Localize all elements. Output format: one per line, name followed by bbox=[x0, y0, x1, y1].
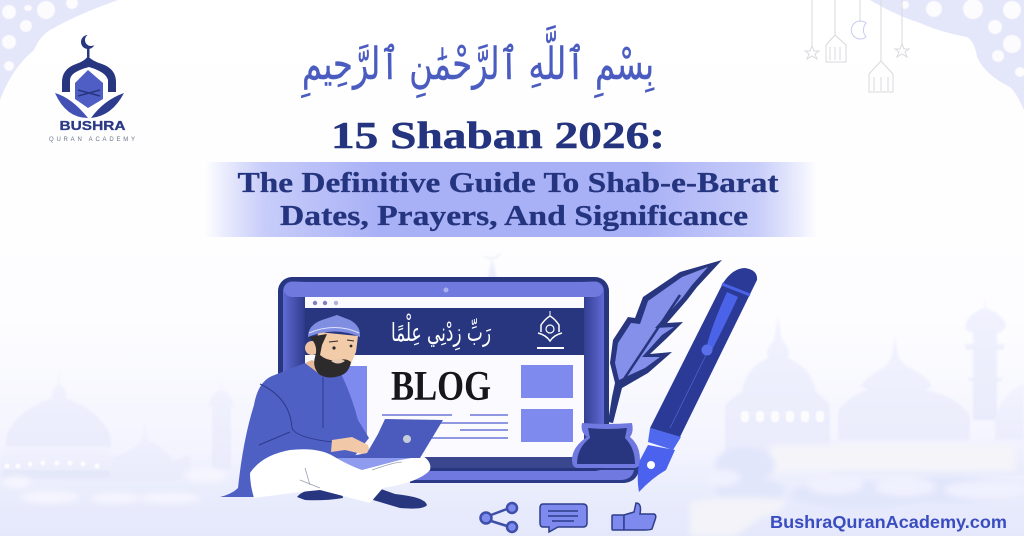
ornament: top-right corner bbox=[870, 0, 1024, 110]
icon: comment bbox=[540, 504, 587, 532]
neck bbox=[305, 360, 335, 376]
logo wordmark: BUSHRA bbox=[60, 119, 126, 133]
ear bbox=[305, 341, 319, 355]
calligraphy: bismillah: بِسْمِ ٱللَّهِ ٱلرَّحْمَٰنِ ٱلرَّحِيمِ bbox=[301, 25, 655, 99]
laptop base bbox=[410, 466, 640, 483]
title: 15 Shaban 2026: bbox=[331, 115, 665, 157]
logo bbox=[49, 34, 135, 143]
subtitle band bbox=[205, 162, 817, 237]
page header bbox=[305, 308, 584, 355]
face bbox=[316, 332, 358, 372]
man with laptop bbox=[220, 315, 443, 509]
browser dots bbox=[313, 301, 338, 305]
pen barrel bbox=[650, 268, 757, 437]
small laptop bbox=[340, 419, 443, 458]
mosque skyline right bbox=[484, 254, 1024, 475]
image blocks bbox=[521, 365, 573, 398]
subtitle line 2: Dates, Prayers, And Significance bbox=[280, 201, 748, 232]
icon: share bbox=[480, 503, 517, 532]
screen bbox=[300, 297, 584, 468]
pen collar bbox=[648, 428, 681, 450]
ornament: top-left corner bbox=[0, 0, 118, 100]
icon: thumbs up bbox=[612, 503, 656, 530]
band under left dome bbox=[3, 470, 110, 478]
website url: BushraQuranAcademy.com bbox=[770, 512, 1007, 532]
fountain pen bbox=[638, 268, 757, 492]
header calligraphy: رَبِّ زِدْنِي عِلْمًا bbox=[391, 314, 491, 351]
icon: mosque with hands bbox=[55, 34, 124, 118]
blog word: BLOG bbox=[391, 364, 491, 410]
robe bbox=[220, 363, 369, 497]
logo tagline: QURAN ACADEMY bbox=[49, 137, 135, 143]
lap shirt bbox=[337, 458, 420, 472]
quill feather bbox=[608, 260, 722, 423]
header mini logo bbox=[537, 311, 564, 348]
cap bbox=[308, 315, 360, 337]
mosque skyline left bbox=[0, 368, 236, 480]
hanging lanterns and stars bbox=[805, 0, 909, 92]
shoes bbox=[297, 489, 343, 500]
clouds right bbox=[690, 445, 1024, 536]
laptop with blog page bbox=[278, 277, 640, 483]
eyes bbox=[332, 346, 336, 350]
white trousers bbox=[250, 449, 430, 503]
laptop frame bbox=[278, 277, 609, 471]
subtitle line 1: The Definitive Guide To Shab-e-Barat bbox=[238, 168, 779, 199]
hand bbox=[331, 437, 370, 454]
ink bottle bbox=[572, 423, 640, 468]
clouds left bbox=[3, 468, 227, 503]
text lines bbox=[382, 414, 508, 439]
pen nib bbox=[638, 445, 675, 492]
dome windows bbox=[4, 411, 824, 468]
hair and beard bbox=[309, 334, 351, 378]
